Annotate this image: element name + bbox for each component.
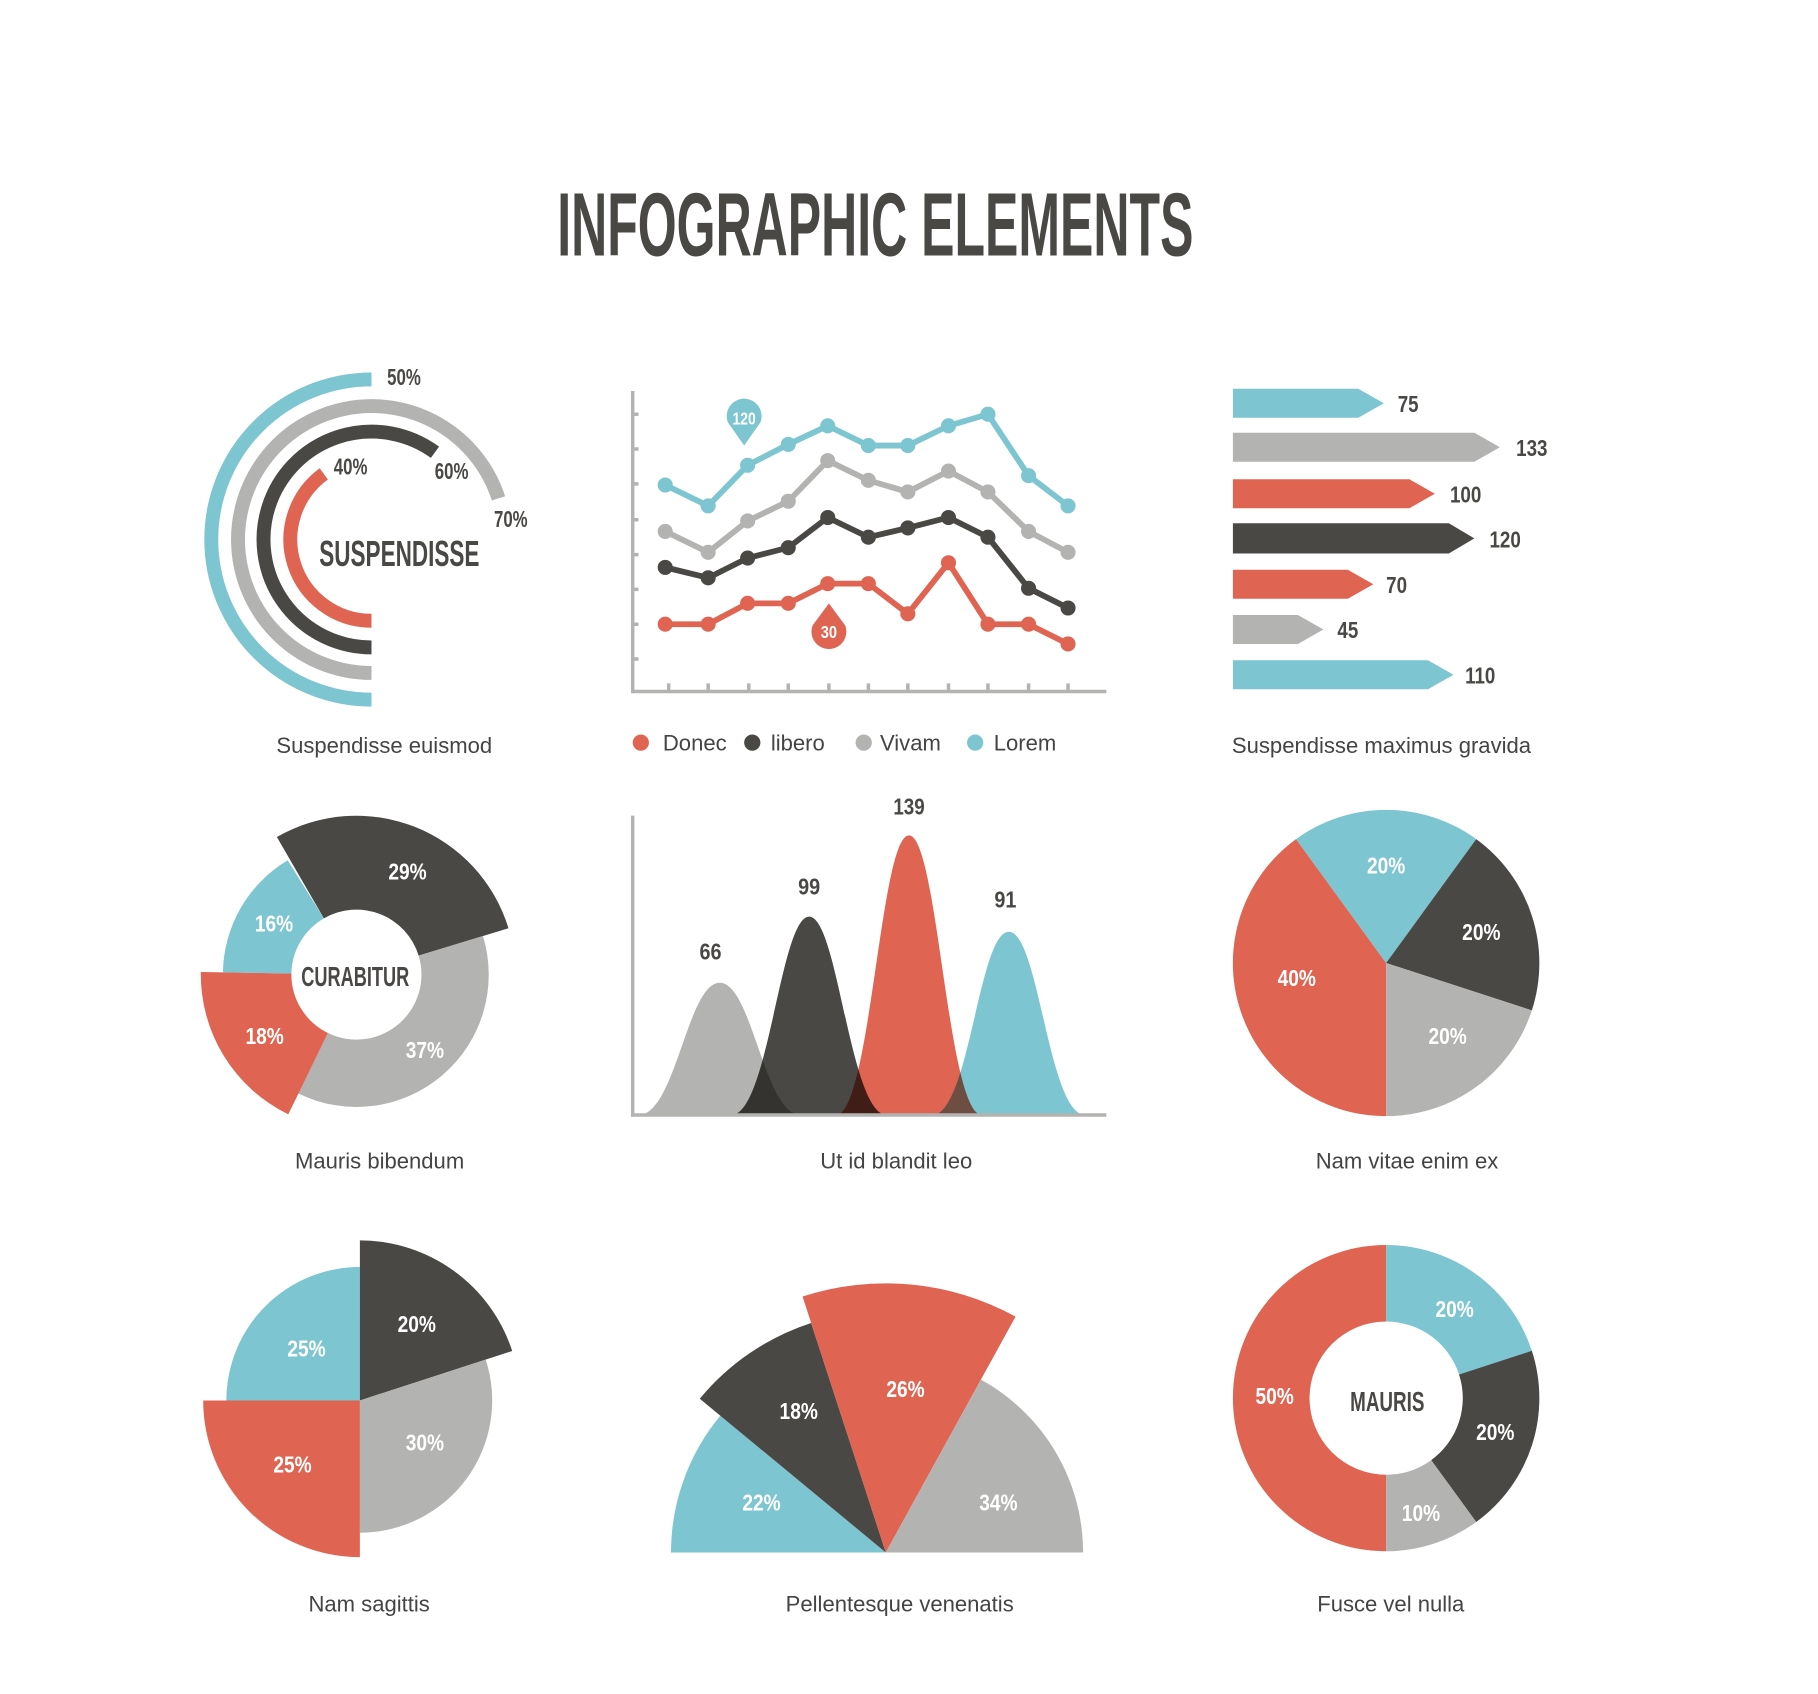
arc labels xyxy=(334,364,528,532)
panel: bell curves xyxy=(633,794,1106,1173)
panel: pie Nam sagittis: 20% xyxy=(398,1311,436,1337)
panel: pie Nam vitae: 20% xyxy=(1462,919,1501,945)
bar values: 110 xyxy=(1465,662,1495,688)
legend: Donec xyxy=(663,731,727,756)
panel: line chart xyxy=(633,391,1106,756)
panel: concentric arcs xyxy=(211,364,528,758)
bar values: 100 xyxy=(1450,481,1481,507)
panel: donut CURABITUR: CURABITUR xyxy=(301,961,409,992)
center label: SUSPENDISSE xyxy=(319,533,479,574)
caption: Mauris bibendum xyxy=(295,1148,464,1173)
caption: Nam sagittis xyxy=(309,1592,430,1617)
panel: pie Nam sagittis: 25% xyxy=(287,1335,326,1361)
arc rings xyxy=(211,379,498,700)
arc labels: 70% xyxy=(494,506,528,532)
panel: pie Nam vitae: 40% xyxy=(1278,965,1316,991)
values: 66 xyxy=(699,939,722,965)
panel: donut CURABITUR xyxy=(201,816,508,1173)
legend: libero xyxy=(771,731,825,756)
arc labels: 50% xyxy=(387,364,421,390)
marker: 30: 30 xyxy=(821,622,837,642)
line: libero xyxy=(658,511,1075,615)
panel: semicircle Pellentesque: 26% xyxy=(886,1376,925,1402)
panel: pie Nam vitae: 20% xyxy=(1429,1023,1467,1049)
title: INFOGRAPHIC ELEMENTS xyxy=(557,174,1193,275)
labels: 18% xyxy=(246,1023,284,1049)
panel: donut MAURIS: 20% xyxy=(1476,1419,1515,1445)
line: Lorem xyxy=(658,407,1075,513)
panel: semicircle Pellentesque: 34% xyxy=(979,1490,1018,1516)
arc labels: 40% xyxy=(334,454,368,480)
caption: Fusce vel nulla xyxy=(1317,1592,1465,1617)
legend xyxy=(633,731,1056,756)
panel: pie Nam sagittis xyxy=(203,1240,512,1617)
values: 99 xyxy=(798,874,820,900)
caption: Suspendisse maximus gravida xyxy=(1232,733,1532,758)
bar values: 70 xyxy=(1386,572,1407,598)
panel: semicircle Pellentesque: 22% xyxy=(742,1490,781,1516)
bar values: 75 xyxy=(1398,391,1419,417)
panel: donut MAURIS: MAURIS xyxy=(1350,1386,1424,1417)
panel: pie Nam vitae xyxy=(1233,810,1539,1173)
bar values: 133 xyxy=(1516,435,1548,461)
bar values: 45 xyxy=(1337,617,1358,643)
caption: Pellentesque venenatis xyxy=(786,1592,1014,1617)
axes xyxy=(633,391,1106,692)
legend: Vivam xyxy=(880,731,941,756)
arc labels: 60% xyxy=(435,458,469,484)
values: 139 xyxy=(893,794,925,820)
panel: donut MAURIS: 50% xyxy=(1256,1383,1294,1409)
marker: 120 xyxy=(727,399,762,446)
labels: 16% xyxy=(255,911,293,937)
labels: 29% xyxy=(388,858,427,884)
marker: 30 xyxy=(811,603,846,649)
panel: donut MAURIS: 10% xyxy=(1402,1500,1440,1526)
caption: Nam vitae enim ex xyxy=(1316,1148,1498,1173)
labels: 37% xyxy=(406,1037,444,1063)
legend: Lorem xyxy=(994,731,1056,756)
panel: donut MAURIS: 20% xyxy=(1435,1296,1474,1322)
panel: pie Nam sagittis: 30% xyxy=(406,1429,444,1455)
panel: pie Nam vitae: 20% xyxy=(1367,853,1406,879)
panel: semicircle Pellentesque: 18% xyxy=(780,1398,818,1424)
marker: 120: 120 xyxy=(733,409,756,429)
panel: pie Nam sagittis: 25% xyxy=(273,1451,312,1477)
line: Donec xyxy=(658,556,1075,651)
bar values: 120 xyxy=(1489,527,1521,553)
caption: Suspendisse euismod xyxy=(276,733,492,758)
panel: semicircle Pellentesque xyxy=(671,1283,1083,1617)
line: Vivam xyxy=(658,454,1075,559)
values: 91 xyxy=(994,886,1016,912)
labels xyxy=(246,858,444,1063)
bar values xyxy=(1337,391,1548,688)
caption: Ut id blandit leo xyxy=(820,1148,972,1173)
panel: arrow bars xyxy=(1232,389,1548,758)
values xyxy=(699,794,1016,965)
panel: donut MAURIS xyxy=(1233,1245,1539,1617)
